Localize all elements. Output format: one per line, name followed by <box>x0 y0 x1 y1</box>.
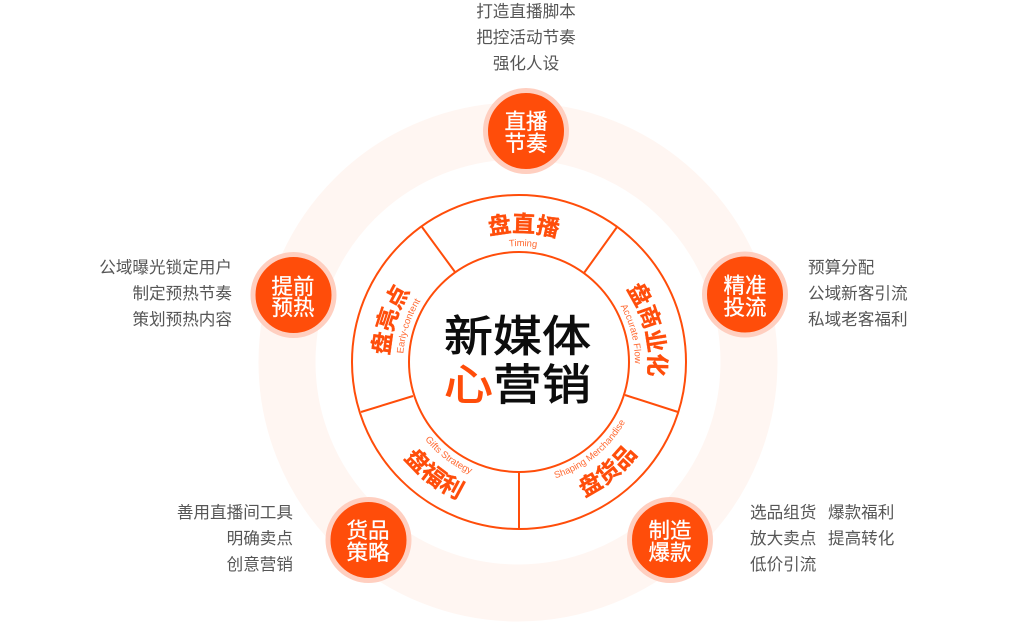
notes: lower right: 爆款福利 <box>828 503 894 522</box>
notes: left: 制定预热节奏 <box>132 284 232 303</box>
badge: 制造爆款 <box>630 500 710 580</box>
segment label: 盘直播 Timing: Timing <box>508 239 537 250</box>
notes: lower left: 善用直播间工具 <box>177 503 293 522</box>
center title <box>444 312 591 409</box>
badge: 提前预热 <box>253 254 334 336</box>
segment label: 盘货品 Shaping Merchandise: 盘货品 <box>578 445 638 498</box>
notes: top: 强化人设 <box>493 54 559 73</box>
notes: lower right: 低价引流 <box>750 555 816 574</box>
badge: 提前预热: 预热 <box>271 296 315 320</box>
segment label: 盘亮点 Early-content: Early-content <box>396 298 420 353</box>
notes: lower left <box>177 503 293 574</box>
notes: left: 公域曝光锁定用户 <box>99 258 232 277</box>
notes: left <box>99 258 232 329</box>
notes: right: 预算分配 <box>808 258 875 277</box>
notes: lower right: 提高转化 <box>828 529 894 548</box>
badge: 精准投流: 投流 <box>723 296 767 320</box>
segment label: 盘直播 Timing: 盘直播 <box>488 212 560 239</box>
notes: right <box>808 258 908 329</box>
notes: top: 把控活动节奏 <box>476 28 576 47</box>
badge: 精准投流: 精准 <box>723 274 767 298</box>
notes: lower left: 明确卖点 <box>227 529 293 548</box>
badge: 制造爆款: 制造 <box>648 519 692 543</box>
badge: 精准投流 <box>704 254 786 335</box>
notes: lower right: 放大卖点 <box>750 529 816 548</box>
segment label: 盘商业化 Accurate Flow: Accurate Flow <box>620 305 642 364</box>
badge: 直播节奏: 直播 <box>504 110 548 134</box>
segment label: 盘福利 Gifts Strategy: Gifts Strategy <box>426 436 472 474</box>
badge: 货品策略: 策略 <box>346 541 390 565</box>
segment label: 盘亮点 Early-content: 盘亮点 <box>370 284 410 355</box>
badge: 直播节奏 <box>486 90 566 172</box>
notes: left: 策划预热内容 <box>132 310 232 329</box>
badge: 提前预热: 提前 <box>271 275 315 299</box>
pale outer ring <box>287 131 749 593</box>
notes: lower right <box>750 503 894 574</box>
notes: right: 私域老客福利 <box>808 310 908 329</box>
notes: lower left: 创意营销 <box>227 555 293 574</box>
center title: 新媒体 <box>444 312 591 361</box>
segment label: 盘福利 Gifts Strategy: 盘福利 <box>403 448 466 500</box>
badge: 货品策略: 货品 <box>346 519 390 543</box>
notes: top: 打造直播脚本 <box>476 2 576 21</box>
wheel rings and dividers <box>352 195 686 529</box>
segment label: 盘货品 Shaping Merchandise <box>554 420 638 498</box>
notes: right: 公域新客引流 <box>808 284 908 303</box>
segment label: 盘货品 Shaping Merchandise: Shaping Merchandise <box>554 420 624 478</box>
notes: lower right: 选品组货 <box>750 503 816 522</box>
badge: 制造爆款: 爆款 <box>648 541 692 565</box>
badge: 货品策略 <box>328 500 409 580</box>
center title: 心营销 <box>444 361 591 409</box>
segment label: 盘商业化 Accurate Flow: 盘商业化 <box>626 282 669 376</box>
badge: 直播节奏: 节奏 <box>504 132 548 156</box>
notes: top <box>476 2 576 73</box>
